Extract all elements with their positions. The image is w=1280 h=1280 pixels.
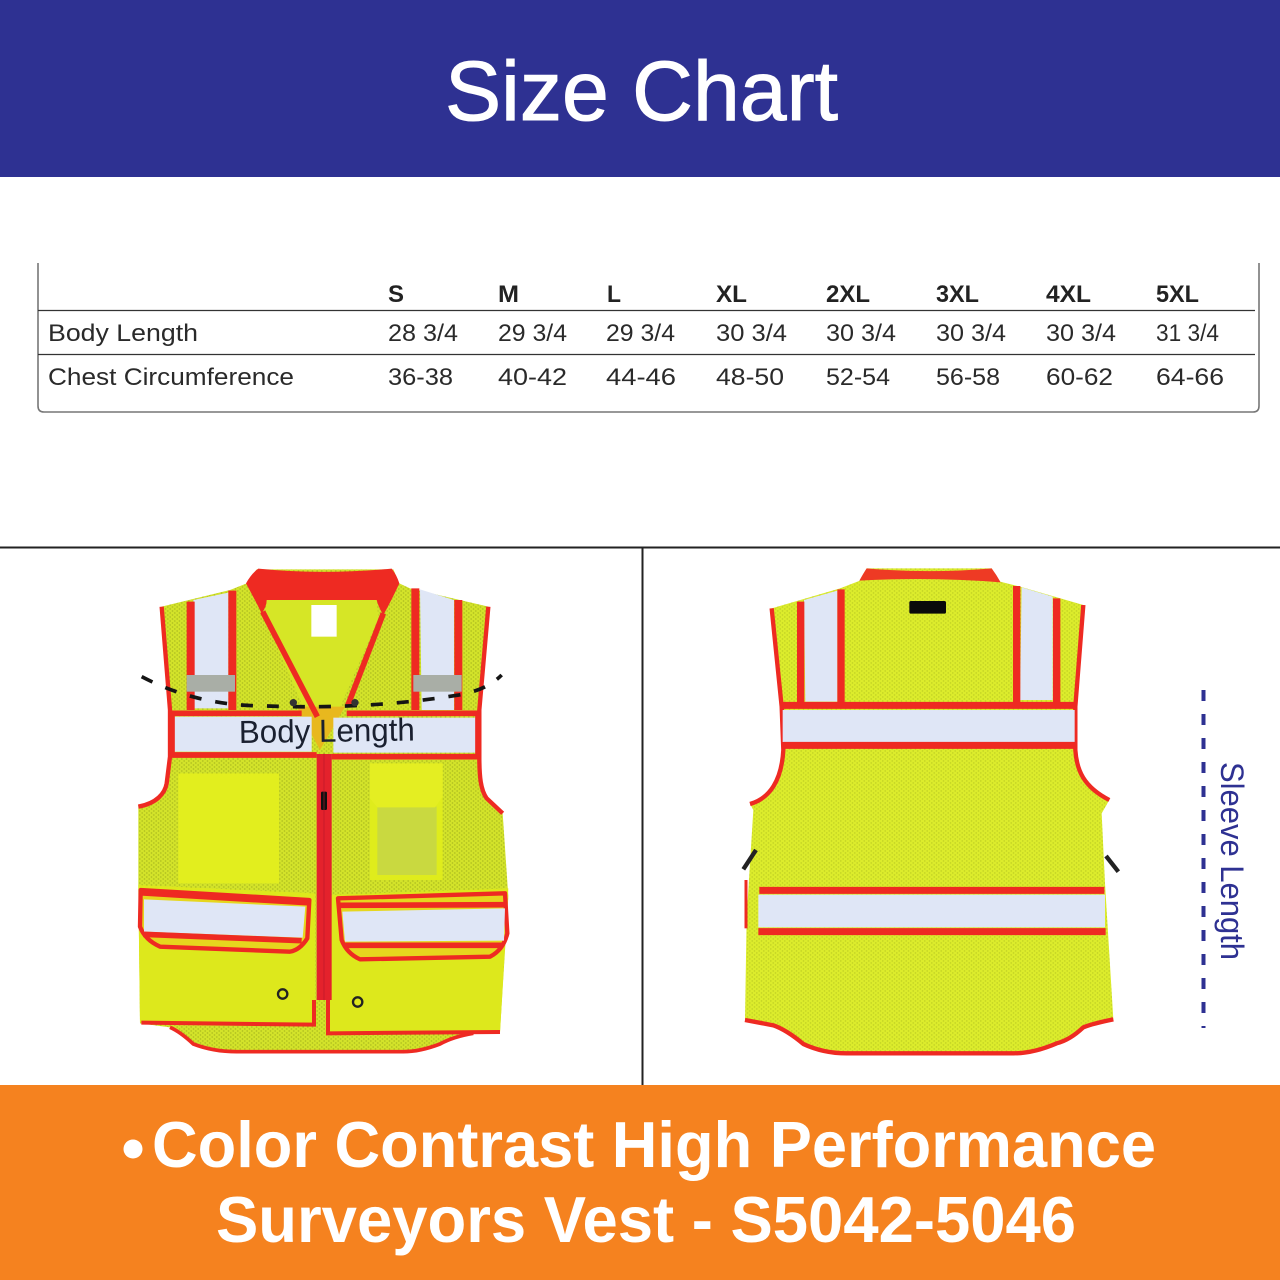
chest circumference row: 40-42 bbox=[498, 364, 567, 391]
left pocket flap bbox=[140, 890, 309, 952]
chest circumference row: Chest Circumference bbox=[48, 364, 294, 391]
back outline trim bbox=[745, 605, 1113, 1053]
size table bbox=[38, 263, 1259, 412]
right neck trim bbox=[347, 613, 383, 707]
back vest illustration bbox=[743, 568, 1118, 1053]
body length row: 29 3/4 bbox=[606, 320, 675, 347]
body length row: 31 3/4 bbox=[1156, 320, 1219, 347]
body length row: 29 3/4 bbox=[498, 320, 567, 347]
title: Size Chart bbox=[445, 44, 838, 138]
body length row: 30 3/4 bbox=[826, 320, 896, 347]
left side zipper pull bbox=[743, 850, 756, 869]
chest circumference row: 44-46 bbox=[606, 364, 676, 391]
body length label: Body Length bbox=[239, 712, 415, 750]
body length row: 30 3/4 bbox=[936, 320, 1006, 347]
header banner bbox=[0, 0, 1280, 177]
lower front panels bbox=[138, 885, 508, 1033]
table header row: 5XL bbox=[1156, 281, 1199, 308]
neck tab bbox=[909, 601, 946, 614]
chest circumference row: 36-38 bbox=[388, 364, 453, 391]
lower reflective band bbox=[758, 890, 1106, 932]
chest circumference row: 64-66 bbox=[1156, 364, 1224, 391]
front vest illustration bbox=[138, 569, 508, 1052]
table header row: XL bbox=[716, 281, 747, 308]
sleeve length label: Sleeve Length bbox=[1214, 762, 1250, 960]
chest measure dashed line bbox=[142, 675, 502, 707]
table header row: 2XL bbox=[826, 281, 870, 308]
bullet bbox=[124, 1140, 142, 1158]
left neck trim bbox=[263, 612, 317, 717]
upper reflective band bbox=[782, 705, 1075, 745]
left shoulder stripe bbox=[187, 591, 235, 710]
chest reflective band bbox=[170, 713, 480, 757]
armhole and shoulder trim bbox=[138, 607, 503, 813]
hem trim bbox=[170, 1027, 473, 1052]
body length row: 30 3/4 bbox=[716, 320, 787, 347]
left shoulder stripe bbox=[801, 589, 841, 703]
zipper bbox=[317, 753, 332, 1000]
right side zipper pull bbox=[1106, 856, 1118, 872]
chest circumference row: 52-54 bbox=[826, 364, 890, 391]
body length row: 28 3/4 bbox=[388, 320, 458, 347]
collar bbox=[246, 569, 399, 615]
table header row: L bbox=[607, 281, 621, 308]
dashed line bbox=[1202, 690, 1206, 1028]
right snap button bbox=[353, 997, 362, 1007]
body length row: 30 3/4 bbox=[1046, 320, 1116, 347]
chest circumference row bbox=[48, 364, 1224, 391]
chest circumference row: 48-50 bbox=[716, 364, 784, 391]
left snap button bbox=[278, 989, 287, 999]
right shoulder stripe bbox=[413, 588, 462, 710]
right chest pocket bbox=[370, 763, 443, 880]
table header row: 4XL bbox=[1046, 281, 1091, 308]
table header row: 3XL bbox=[936, 281, 979, 308]
neck label bbox=[311, 605, 337, 637]
left chest pocket bbox=[178, 773, 279, 883]
neck opening bbox=[265, 600, 378, 750]
back vest body bbox=[745, 568, 1113, 1053]
chest circumference row: 56-58 bbox=[936, 364, 1000, 391]
product code: Surveyors Vest - S5042-5046 bbox=[216, 1183, 1076, 1256]
table header row bbox=[388, 281, 1199, 308]
right shoulder stripe bbox=[1017, 586, 1057, 703]
body length row bbox=[48, 320, 1219, 347]
footer banner bbox=[0, 1085, 1280, 1280]
table header row: S bbox=[388, 281, 404, 308]
right pocket flap bbox=[338, 893, 507, 959]
table header row: M bbox=[498, 281, 519, 308]
side pocket edge bbox=[741, 880, 750, 928]
front vest body bbox=[138, 569, 508, 1052]
body length row: Body Length bbox=[48, 320, 198, 347]
product name: Color Contrast High Performance bbox=[152, 1108, 1156, 1181]
back collar bbox=[859, 568, 1001, 582]
chest circumference row: 60-62 bbox=[1046, 364, 1113, 391]
